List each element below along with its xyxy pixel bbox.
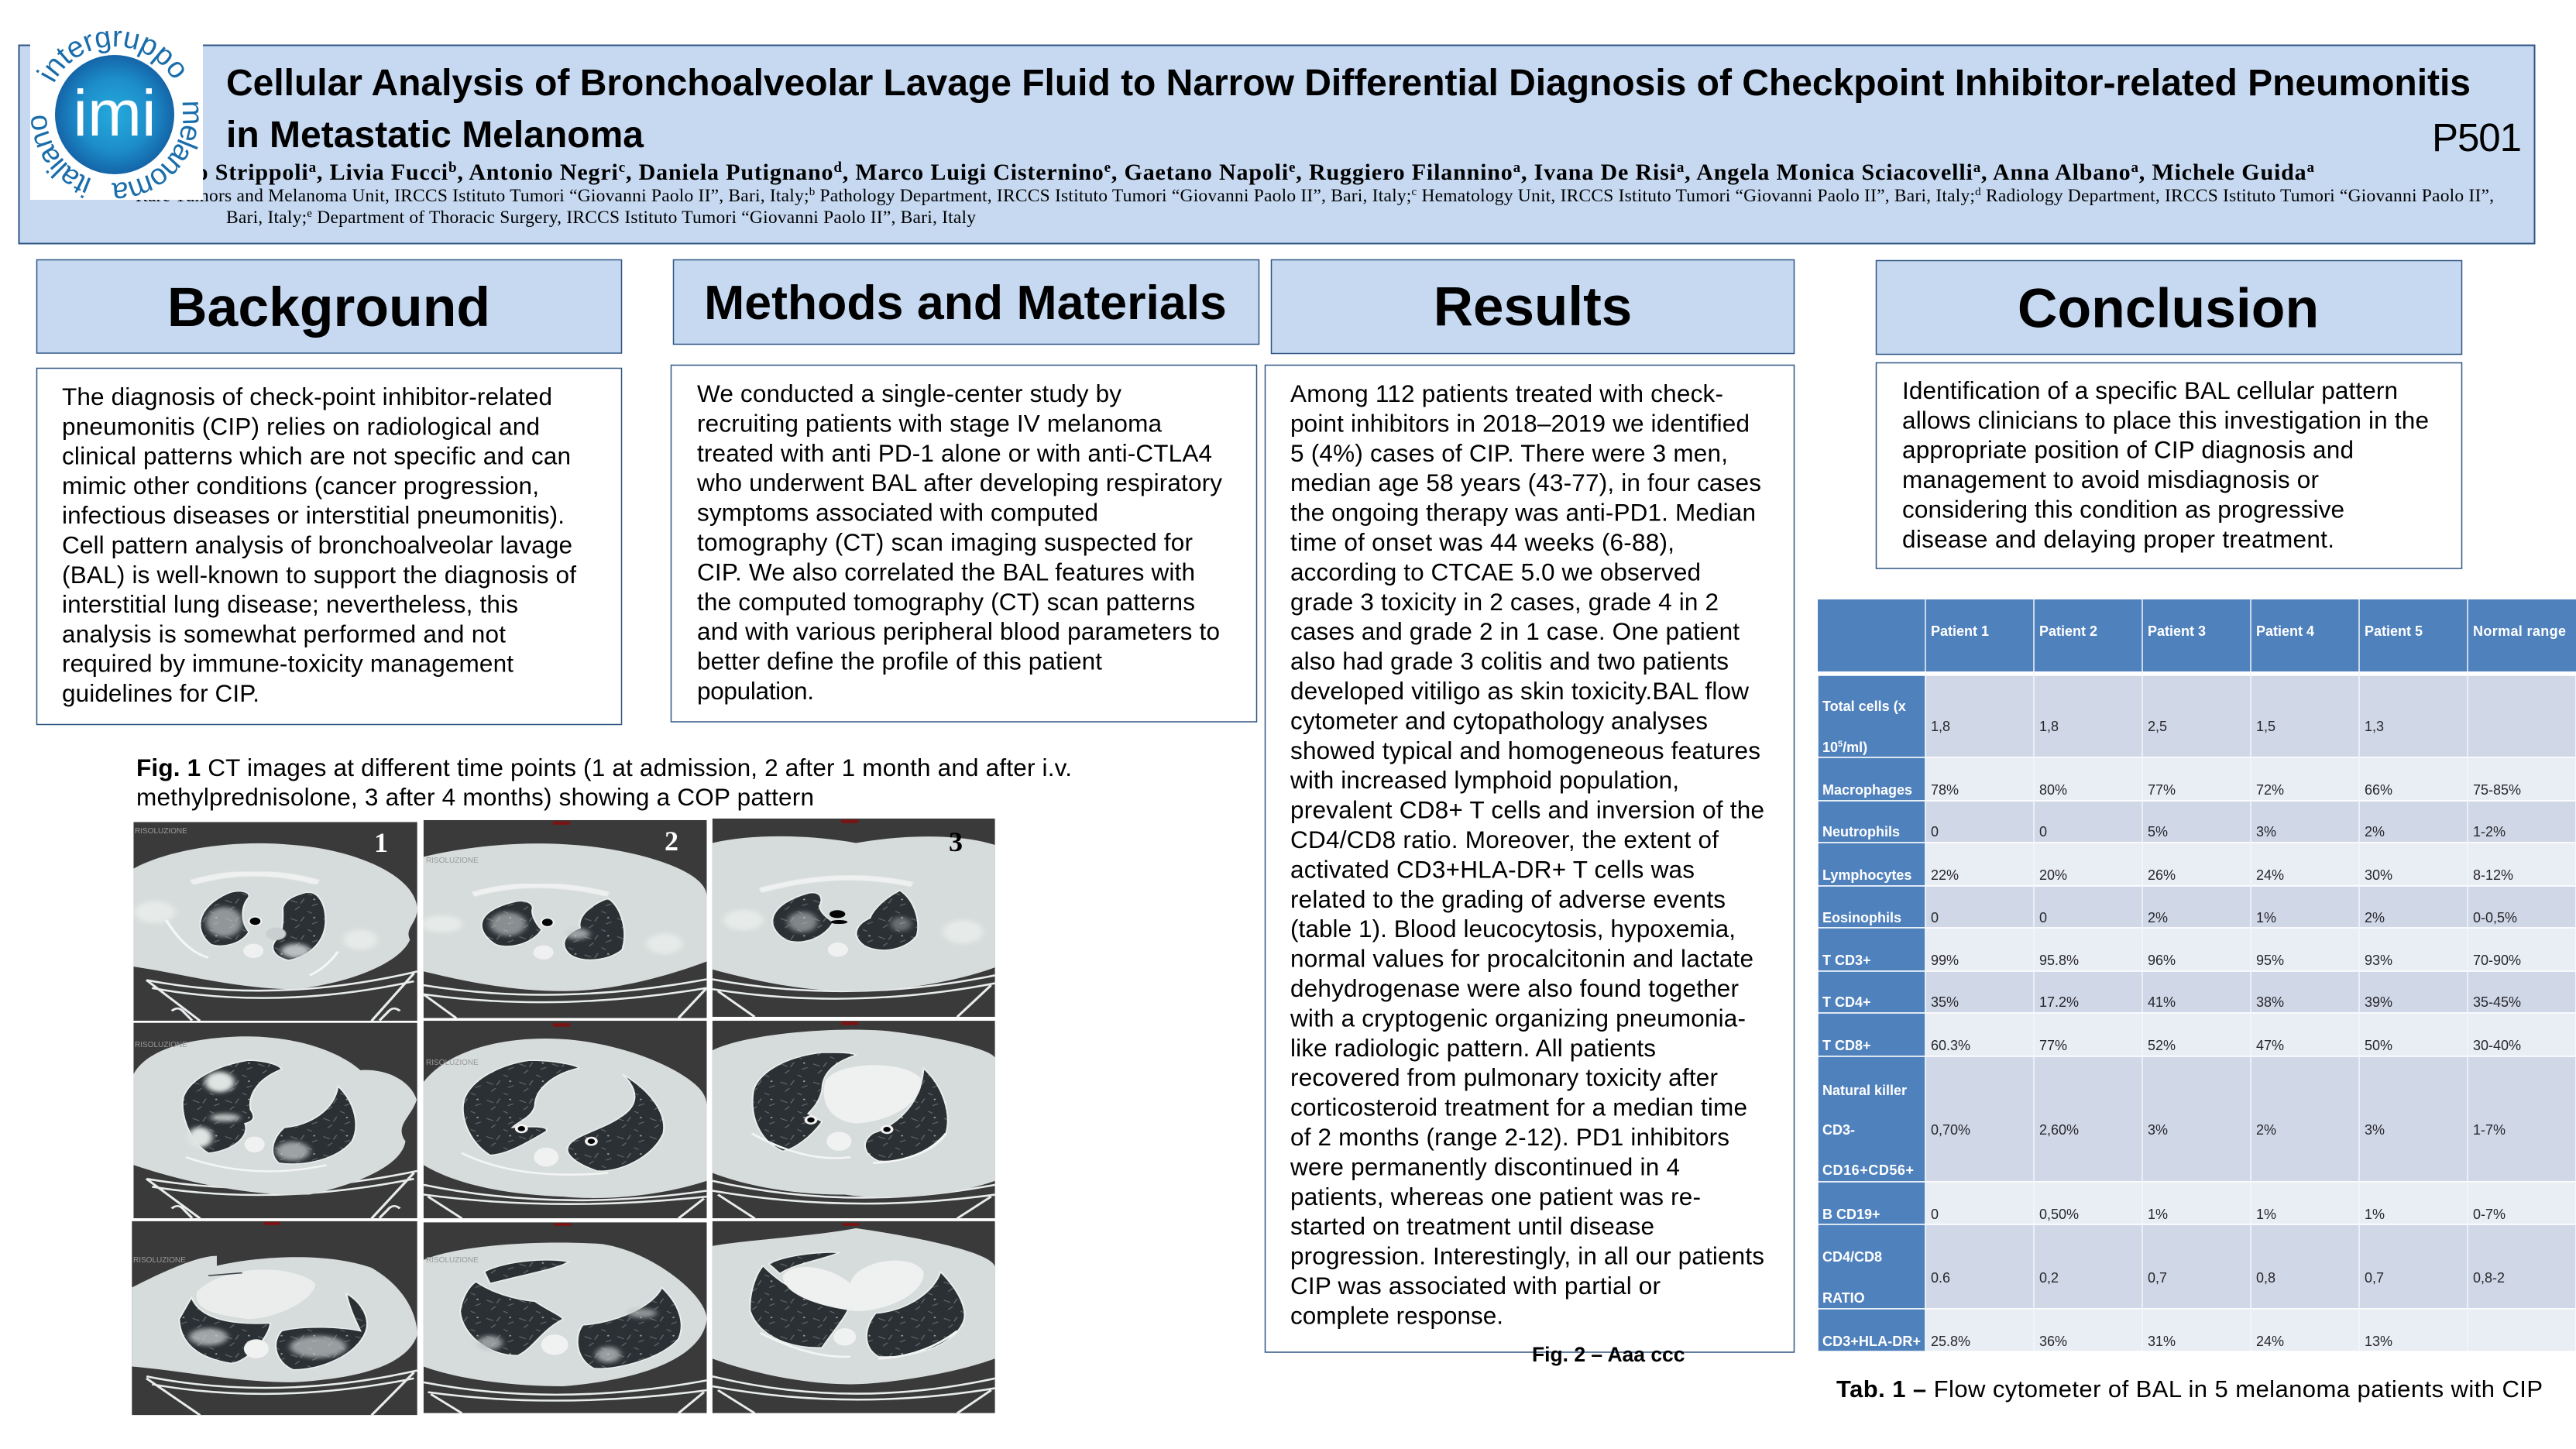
text block: background — [37, 369, 621, 725]
text block: results: time of onset was 44 weeks (6-88), — [1290, 528, 1674, 556]
caption: table 1: Tab. 1 – Flow cytometer of BAL in 5 melanoma patients with CIP — [1836, 1375, 2543, 1403]
text block: background: interstitial lung disease; nevertheless, this — [62, 590, 518, 618]
panel: methods and materials — [671, 260, 1259, 722]
authors: , Ivana De Risi — [1521, 160, 1676, 185]
heading: conclusion — [1876, 260, 2461, 355]
CT image: row 1 after one month — [422, 820, 706, 1018]
row: neutrophils: 0 — [1931, 824, 1939, 840]
text block: results: point inhibitors in 2018–2019 we identified — [1290, 409, 1750, 437]
row: total cells: 1,3 — [2365, 719, 2384, 734]
text block: background: required by immune-toxicity management — [62, 650, 513, 678]
authors: , Angela Monica Sciacovelli — [1685, 160, 1973, 185]
CT image: row 2 after four months — [713, 1021, 995, 1218]
affiliations — [136, 186, 2494, 228]
row: macrophages: 77% — [2148, 782, 2176, 798]
title banner — [19, 45, 2534, 243]
affiliations: e — [307, 208, 312, 220]
row: B CD19+: 1% — [2365, 1207, 2385, 1222]
row: B CD19+: 0 — [1931, 1207, 1939, 1222]
row: CD4/CD8 ratio: RATIO — [1822, 1290, 1865, 1306]
icon: intergruppo melanoma italiano logo — [30, 31, 203, 200]
text block: methods: and with various peripheral blood parameters to — [697, 617, 1220, 645]
row: B CD19+: 0-7% — [2473, 1207, 2506, 1222]
CT image: row 2 admission — [133, 1023, 417, 1218]
table header row: Patient 3 — [2148, 623, 2206, 639]
icon: intergruppo melanoma italiano logo: intergruppo — [36, 31, 184, 82]
table header row: Patient 1 — [1931, 623, 1989, 639]
row: eosinophils: 1% — [2256, 910, 2276, 925]
text block: results: CIP was associated with partial or — [1290, 1272, 1661, 1300]
row: total cells: 1,8 — [1931, 719, 1950, 734]
row: T CD4+: 35-45% — [2473, 994, 2521, 1010]
row: T CD3+: 70-90% — [2473, 953, 2521, 968]
text block: results: complete response. — [1290, 1301, 1503, 1329]
text block: methods: better define the profile of this patient — [697, 647, 1102, 675]
row: natural killer: 1-7% — [2473, 1122, 2506, 1138]
text block: results: activated CD3+HLA-DR+ T cells was — [1290, 855, 1695, 883]
CT scanner labels: RISOLUZIONE — [426, 1059, 479, 1067]
table cell fills — [1818, 599, 2576, 1351]
table header row: Normal range — [2473, 623, 2566, 639]
row: neutrophils: 5% — [2148, 824, 2168, 840]
time point labels: 2 — [665, 826, 678, 857]
affiliations: b — [809, 186, 815, 198]
authors: a — [2131, 160, 2138, 176]
text block: results: progression. Interestingly, in all our patients — [1290, 1242, 1764, 1270]
text block: conclusion: disease and delaying proper treatment. — [1902, 525, 2334, 553]
text block: results: recovered from pulmonary toxicity after — [1290, 1063, 1718, 1091]
authors: , Daniela Putignano — [626, 160, 833, 185]
row: natural killer: 2,60% — [2039, 1122, 2079, 1138]
row: T CD8+: 47% — [2256, 1038, 2284, 1053]
row: CD4/CD8 ratio: 0,8 — [2256, 1270, 2275, 1286]
authors: a — [1513, 160, 1521, 176]
text block: results: (table 1). Blood leucocytosis, hypoxemia, — [1290, 915, 1736, 943]
text block: methods: the computed tomography (CT) scan patterns — [697, 588, 1195, 616]
row: total cells: 10 — [1822, 740, 1838, 755]
poster title: Cellular Analysis of Bronchoalveolar Lavage Fluid to Narrow Differential Diagnosis of Checkpoint Inhibitor-related Pneumonitis — [226, 63, 2471, 104]
text block: methods: tomography (CT) scan imaging suspected for — [697, 528, 1193, 556]
row: T CD8+ — [1822, 1038, 2521, 1053]
row: CD4/CD8 ratio: 0,2 — [2039, 1270, 2059, 1286]
row: T CD3+: T CD3+ — [1822, 953, 1871, 968]
text block: results: 5 (4%) cases of CIP. There were 3 men, — [1290, 439, 1728, 467]
text block: conclusion — [1876, 362, 2461, 568]
row: T CD8+: 50% — [2365, 1038, 2392, 1053]
row: natural killer: 2% — [2256, 1122, 2276, 1138]
text block: results — [1266, 366, 1794, 1352]
row: lymphocytes: Lymphocytes — [1822, 867, 1911, 883]
CT image: row 1 after four months — [713, 819, 995, 1017]
text block: methods: CIP. We also correlated the BAL features with — [697, 558, 1195, 585]
affiliations: Hematology Unit, IRCCS Istituto Tumori “Giovanni Paolo II”, Bari, Italy; — [1417, 186, 1975, 206]
text block: results: Among 112 patients treated with check- — [1290, 379, 1723, 407]
row: eosinophils — [1822, 910, 2517, 925]
authors: e — [1104, 160, 1111, 176]
row: CD3+HLA-DR+ — [1822, 1334, 2392, 1349]
text block: background: infectious diseases or interstitial pneumonitis). — [62, 501, 565, 529]
authors: b — [448, 160, 457, 176]
authors: d — [833, 160, 842, 176]
authors: , Anna Albano — [1981, 160, 2131, 185]
text block: conclusion: management to avoid misdiagnosis or — [1902, 465, 2319, 493]
table header row: Patient 4 — [2256, 623, 2314, 639]
CT image: row 3 after four months — [713, 1221, 995, 1413]
row: lymphocytes: 26% — [2148, 867, 2176, 883]
caption: figure 2: Fig. 2 – Aaa ccc — [1532, 1343, 1685, 1366]
text block: results: the ongoing therapy was anti-PD1. Median — [1290, 499, 1756, 527]
text block: results: patients, whereas one patient was re- — [1290, 1183, 1701, 1210]
row: neutrophils — [1822, 824, 2506, 840]
row: CD3+HLA-DR+: 13% — [2365, 1334, 2392, 1349]
table header row — [1931, 623, 2566, 639]
row: T CD3+: 99% — [1931, 953, 1959, 968]
row: T CD3+: 96% — [2148, 953, 2176, 968]
row: total cells: 5 — [1838, 740, 1843, 749]
row: CD3+HLA-DR+: CD3+HLA-DR+ — [1822, 1334, 1921, 1349]
CT scanner labels: RISOLUZIONE — [133, 1256, 186, 1265]
row: CD3+HLA-DR+: 36% — [2039, 1334, 2067, 1349]
poster number: P501 — [2432, 115, 2522, 160]
row: T CD4+: 35% — [1931, 994, 1959, 1010]
row: B CD19+: 1% — [2256, 1207, 2276, 1222]
affiliations: Bari, Italy; — [226, 208, 307, 228]
CT image: row 1 admission — [133, 822, 417, 1021]
text block: background: guidelines for CIP. — [62, 679, 259, 707]
row: T CD3+: 95% — [2256, 953, 2284, 968]
row: macrophages: 72% — [2256, 782, 2284, 798]
row: eosinophils: 0 — [1931, 910, 1939, 925]
row: CD3+HLA-DR+: 25.8% — [1931, 1334, 1970, 1349]
row: CD4/CD8 ratio: 0,8-2 — [2473, 1270, 2505, 1286]
row: natural killer: 3% — [2148, 1122, 2168, 1138]
icon: intergruppo melanoma italiano logo: imi — [73, 77, 156, 149]
row: macrophages: 66% — [2365, 782, 2392, 798]
affiliations: Department of Thoracic Surgery, IRCCS Istituto Tumori “Giovanni Paolo II”, Bari, Italy — [312, 208, 976, 228]
row: CD4/CD8 ratio: 0.6 — [1931, 1270, 1950, 1286]
CT image: row 2 after one month — [424, 1021, 706, 1218]
text block: results: normal values for procalcitonin and lactate — [1290, 945, 1753, 973]
text block: results: also had grade 3 colitis and two patients — [1290, 647, 1729, 675]
row: CD3+HLA-DR+: 24% — [2256, 1334, 2284, 1349]
text block: results: cases and grade 2 in 1 case. One patient — [1290, 617, 1740, 645]
authors: , Marco Luigi Cisternino — [843, 160, 1104, 185]
heading: background: Background — [167, 276, 490, 338]
row: T CD4+: T CD4+ — [1822, 994, 1871, 1010]
text block: methods: symptoms associated with computed — [697, 499, 1098, 527]
heading: conclusion: Conclusion — [2018, 277, 2319, 339]
row: eosinophils: 2% — [2365, 910, 2385, 925]
authors: a — [1677, 160, 1685, 176]
text block: results: were permanently discontinued in 4 — [1290, 1152, 1680, 1180]
row: natural killer: 0,70% — [1931, 1122, 1970, 1138]
row: CD4/CD8 ratio: 0,7 — [2148, 1270, 2167, 1286]
authors: a — [1973, 160, 1981, 176]
time point labels — [374, 826, 963, 858]
heading: results: Results — [1434, 276, 1632, 338]
text block: results: cytometer and cytopathology analyses — [1290, 706, 1708, 734]
figure: CT image grid — [132, 819, 995, 1415]
text block: results: according to CTCAE 5.0 we observed — [1290, 558, 1701, 585]
table header row: Patient 2 — [2039, 623, 2097, 639]
heading: background — [37, 260, 621, 353]
text block: methods: who underwent BAL after developing respiratory — [696, 469, 1222, 496]
text block: results: median age 58 years (43-77), in four cases — [1290, 469, 1761, 496]
text block: results: of 2 months (range 2-12). PD1 inhibitors — [1290, 1123, 1729, 1151]
row: lymphocytes: 8-12% — [2473, 867, 2513, 883]
authors: a — [309, 160, 317, 176]
row: T CD3+ — [1822, 953, 2521, 968]
row: T CD8+: 77% — [2039, 1038, 2067, 1053]
text block: background: mimic other conditions (cancer progression, — [62, 472, 539, 500]
affiliations: Rare Tumors and Melanoma Unit, IRCCS Istituto Tumori “Giovanni Paolo II”, Bari, Italy; — [136, 186, 809, 206]
time point labels: 3 — [949, 826, 963, 857]
row: T CD8+: 52% — [2148, 1038, 2176, 1053]
row: T CD8+: 30-40% — [2473, 1038, 2521, 1053]
panel: conclusion — [1876, 260, 2461, 568]
row: T CD4+: 38% — [2256, 994, 2284, 1010]
text block: background: clinical patterns which are not specific and can — [62, 442, 571, 470]
text block: background: Cell pattern analysis of bronchoalveolar lavage — [62, 531, 572, 559]
text block: results: related to the grading of adverse events — [1290, 885, 1726, 913]
row: T CD8+: T CD8+ — [1822, 1038, 1871, 1053]
row: macrophages: 75-85% — [2473, 782, 2521, 798]
row: neutrophils: 3% — [2256, 824, 2276, 840]
row: CD4/CD8 ratio: 0,7 — [2365, 1270, 2384, 1286]
row: B CD19+: 1% — [2148, 1207, 2168, 1222]
CT scanner labels: RISOLUZIONE — [426, 1256, 479, 1265]
authors: , Antonio Negri — [457, 160, 618, 185]
row: eosinophils: 0-0,5% — [2473, 910, 2517, 925]
affiliations: Radiology Department, IRCCS Istituto Tumori “Giovanni Paolo II”, — [1981, 186, 2494, 206]
heading: methods and materials: Methods and Materials — [704, 276, 1227, 330]
row: natural killer — [1822, 1083, 2506, 1178]
row: natural killer: CD16+CD56+ — [1822, 1162, 1914, 1178]
row: lymphocytes: 24% — [2256, 867, 2284, 883]
panel: background — [37, 260, 621, 725]
panel: results — [1266, 260, 1794, 1366]
authors: , Livia Fucci — [317, 160, 448, 185]
poster title — [226, 63, 2471, 156]
text block: results: corticosteroid treatment for a median time — [1290, 1094, 1747, 1121]
icon: intergruppo melanoma italiano logo: melanoma — [112, 102, 199, 198]
text block: conclusion: allows clinicians to place this investigation in the — [1902, 406, 2429, 434]
text block: results: with a cryptogenic organizing pneumonia- — [1290, 1004, 1746, 1032]
row: macrophages: 78% — [1931, 782, 1959, 798]
text block: results: with increased lymphoid population, — [1290, 766, 1679, 794]
row: total cells: 2,5 — [2148, 719, 2167, 734]
row: lymphocytes: 30% — [2365, 867, 2392, 883]
caption: figure 1 — [136, 754, 1072, 811]
row: neutrophils: 2% — [2365, 824, 2385, 840]
row: macrophages — [1822, 782, 2521, 798]
text block: conclusion: appropriate position of CIP diagnosis and — [1902, 436, 2354, 464]
text block: methods: treated with anti PD-1 alone or with anti-CTLA4 — [697, 439, 1212, 467]
caption: figure 1: methylprednisolone, 3 after 4 months) showing a COP pattern — [136, 783, 814, 811]
heading: methods and materials — [674, 260, 1259, 344]
row: natural killer: CD3- — [1822, 1122, 1855, 1138]
text block: background: The diagnosis of check-point inhibitor-related — [62, 383, 552, 410]
text block: background: (BAL) is well-known to support the diagnosis of — [62, 561, 576, 589]
CT scanner labels: RISOLUZIONE — [135, 1041, 187, 1049]
row: CD4/CD8 ratio: CD4/CD8 — [1822, 1249, 1882, 1265]
row: neutrophils: 1-2% — [2473, 824, 2506, 840]
table header row: Patient 5 — [2365, 623, 2423, 639]
table: BAL flow cytometry — [1818, 599, 2576, 1351]
row: neutrophils: Neutrophils — [1822, 824, 1900, 840]
row: eosinophils: 0 — [2039, 910, 2047, 925]
poster title: in Metastatic Melanoma — [226, 115, 644, 156]
CT scanner labels: RISOLUZIONE — [135, 827, 187, 836]
row: T CD3+: 95.8% — [2039, 953, 2079, 968]
row: macrophages: 80% — [2039, 782, 2067, 798]
row: CD3+HLA-DR+: 31% — [2148, 1334, 2176, 1349]
text block: results: started on treatment until disease — [1290, 1212, 1654, 1240]
authors: e — [1289, 160, 1295, 176]
heading: results — [1272, 260, 1794, 353]
affiliations: Pathology Department, IRCCS Istituto Tumori “Giovanni Paolo II”, Bari, Italy; — [815, 186, 1411, 206]
row: B CD19+: B CD19+ — [1822, 1207, 1880, 1222]
authors: a — [2306, 160, 2314, 176]
authors: , Gaetano Napoli — [1111, 160, 1288, 185]
text block: results: dehydrogenase were also found together — [1290, 974, 1739, 1002]
row: total cells: 1,8 — [2039, 719, 2059, 734]
CT scanner labels: RISOLUZIONE — [426, 857, 479, 865]
row: natural killer: Natural killer — [1822, 1083, 1907, 1098]
row: CD4/CD8 ratio — [1822, 1249, 2505, 1306]
row: T CD4+ — [1822, 994, 2521, 1010]
affiliations: d — [1975, 186, 1981, 198]
authors: Sabino Strippoli — [136, 160, 308, 185]
row: T CD4+: 39% — [2365, 994, 2392, 1010]
CT image: row 3 after one month — [424, 1222, 706, 1413]
row: eosinophils: 2% — [2148, 910, 2168, 925]
row: neutrophils: 0 — [2039, 824, 2047, 840]
text block: results: showed typical and homogeneous features — [1290, 737, 1760, 764]
row: B CD19+: 0,50% — [2039, 1207, 2079, 1222]
row: T CD8+: 60.3% — [1931, 1038, 1970, 1053]
row: T CD4+: 41% — [2148, 994, 2176, 1010]
CT scanner labels — [133, 827, 479, 1265]
authors: , Michele Guida — [2139, 160, 2306, 185]
authors: c — [619, 160, 625, 176]
row: total cells — [1822, 699, 2384, 755]
row: lymphocytes — [1822, 867, 2513, 883]
text block: results: prevalent CD8+ T cells and inversion of the — [1290, 796, 1764, 824]
row: macrophages: Macrophages — [1822, 782, 1912, 798]
text block: results: like radiologic pattern. All patients — [1290, 1034, 1656, 1062]
text block: background: pneumonitis (CIP) relies on radiological and — [62, 412, 540, 440]
row: B CD19+ — [1822, 1207, 2506, 1222]
text block: results: grade 3 toxicity in 2 cases, grade 4 in 2 — [1290, 588, 1719, 616]
text block: methods — [671, 366, 1256, 722]
text block: conclusion: Identification of a specific BAL cellular pattern — [1902, 376, 2398, 404]
time point labels: 1 — [374, 827, 388, 858]
row: total cells: 1,5 — [2256, 719, 2275, 734]
text block: methods: recruiting patients with stage IV melanoma — [697, 409, 1162, 437]
CT image: row 3 admission — [132, 1221, 417, 1415]
row: total cells: /ml) — [1843, 740, 1867, 755]
text block: results: developed vitiligo as skin toxicity.BAL flow — [1290, 677, 1749, 705]
row: T CD3+: 93% — [2365, 953, 2392, 968]
affiliations: c — [1412, 186, 1417, 198]
row: T CD4+: 17.2% — [2039, 994, 2079, 1010]
text block: results: CD4/CD8 ratio. Moreover, the extent of — [1290, 826, 1719, 853]
row: eosinophils: Eosinophils — [1822, 910, 1901, 925]
text block: methods: population. — [697, 677, 814, 705]
row: natural killer: 3% — [2365, 1122, 2385, 1138]
text block: conclusion: considering this condition as progressive — [1902, 496, 2344, 524]
caption: figure 1: Fig. 1 CT images at different time points (1 at admission, 2 after 1 month and after i.v. — [136, 754, 1072, 781]
icon: intergruppo melanoma italiano logo: italiano — [31, 116, 91, 198]
text block: background: analysis is somewhat performed and not — [62, 620, 506, 647]
text block: methods: We conducted a single-center study by — [697, 379, 1121, 407]
authors: , Ruggiero Filannino — [1296, 160, 1513, 185]
row: total cells: Total cells (x — [1822, 699, 1906, 714]
row: lymphocytes: 22% — [1931, 867, 1959, 883]
row: lymphocytes: 20% — [2039, 867, 2067, 883]
